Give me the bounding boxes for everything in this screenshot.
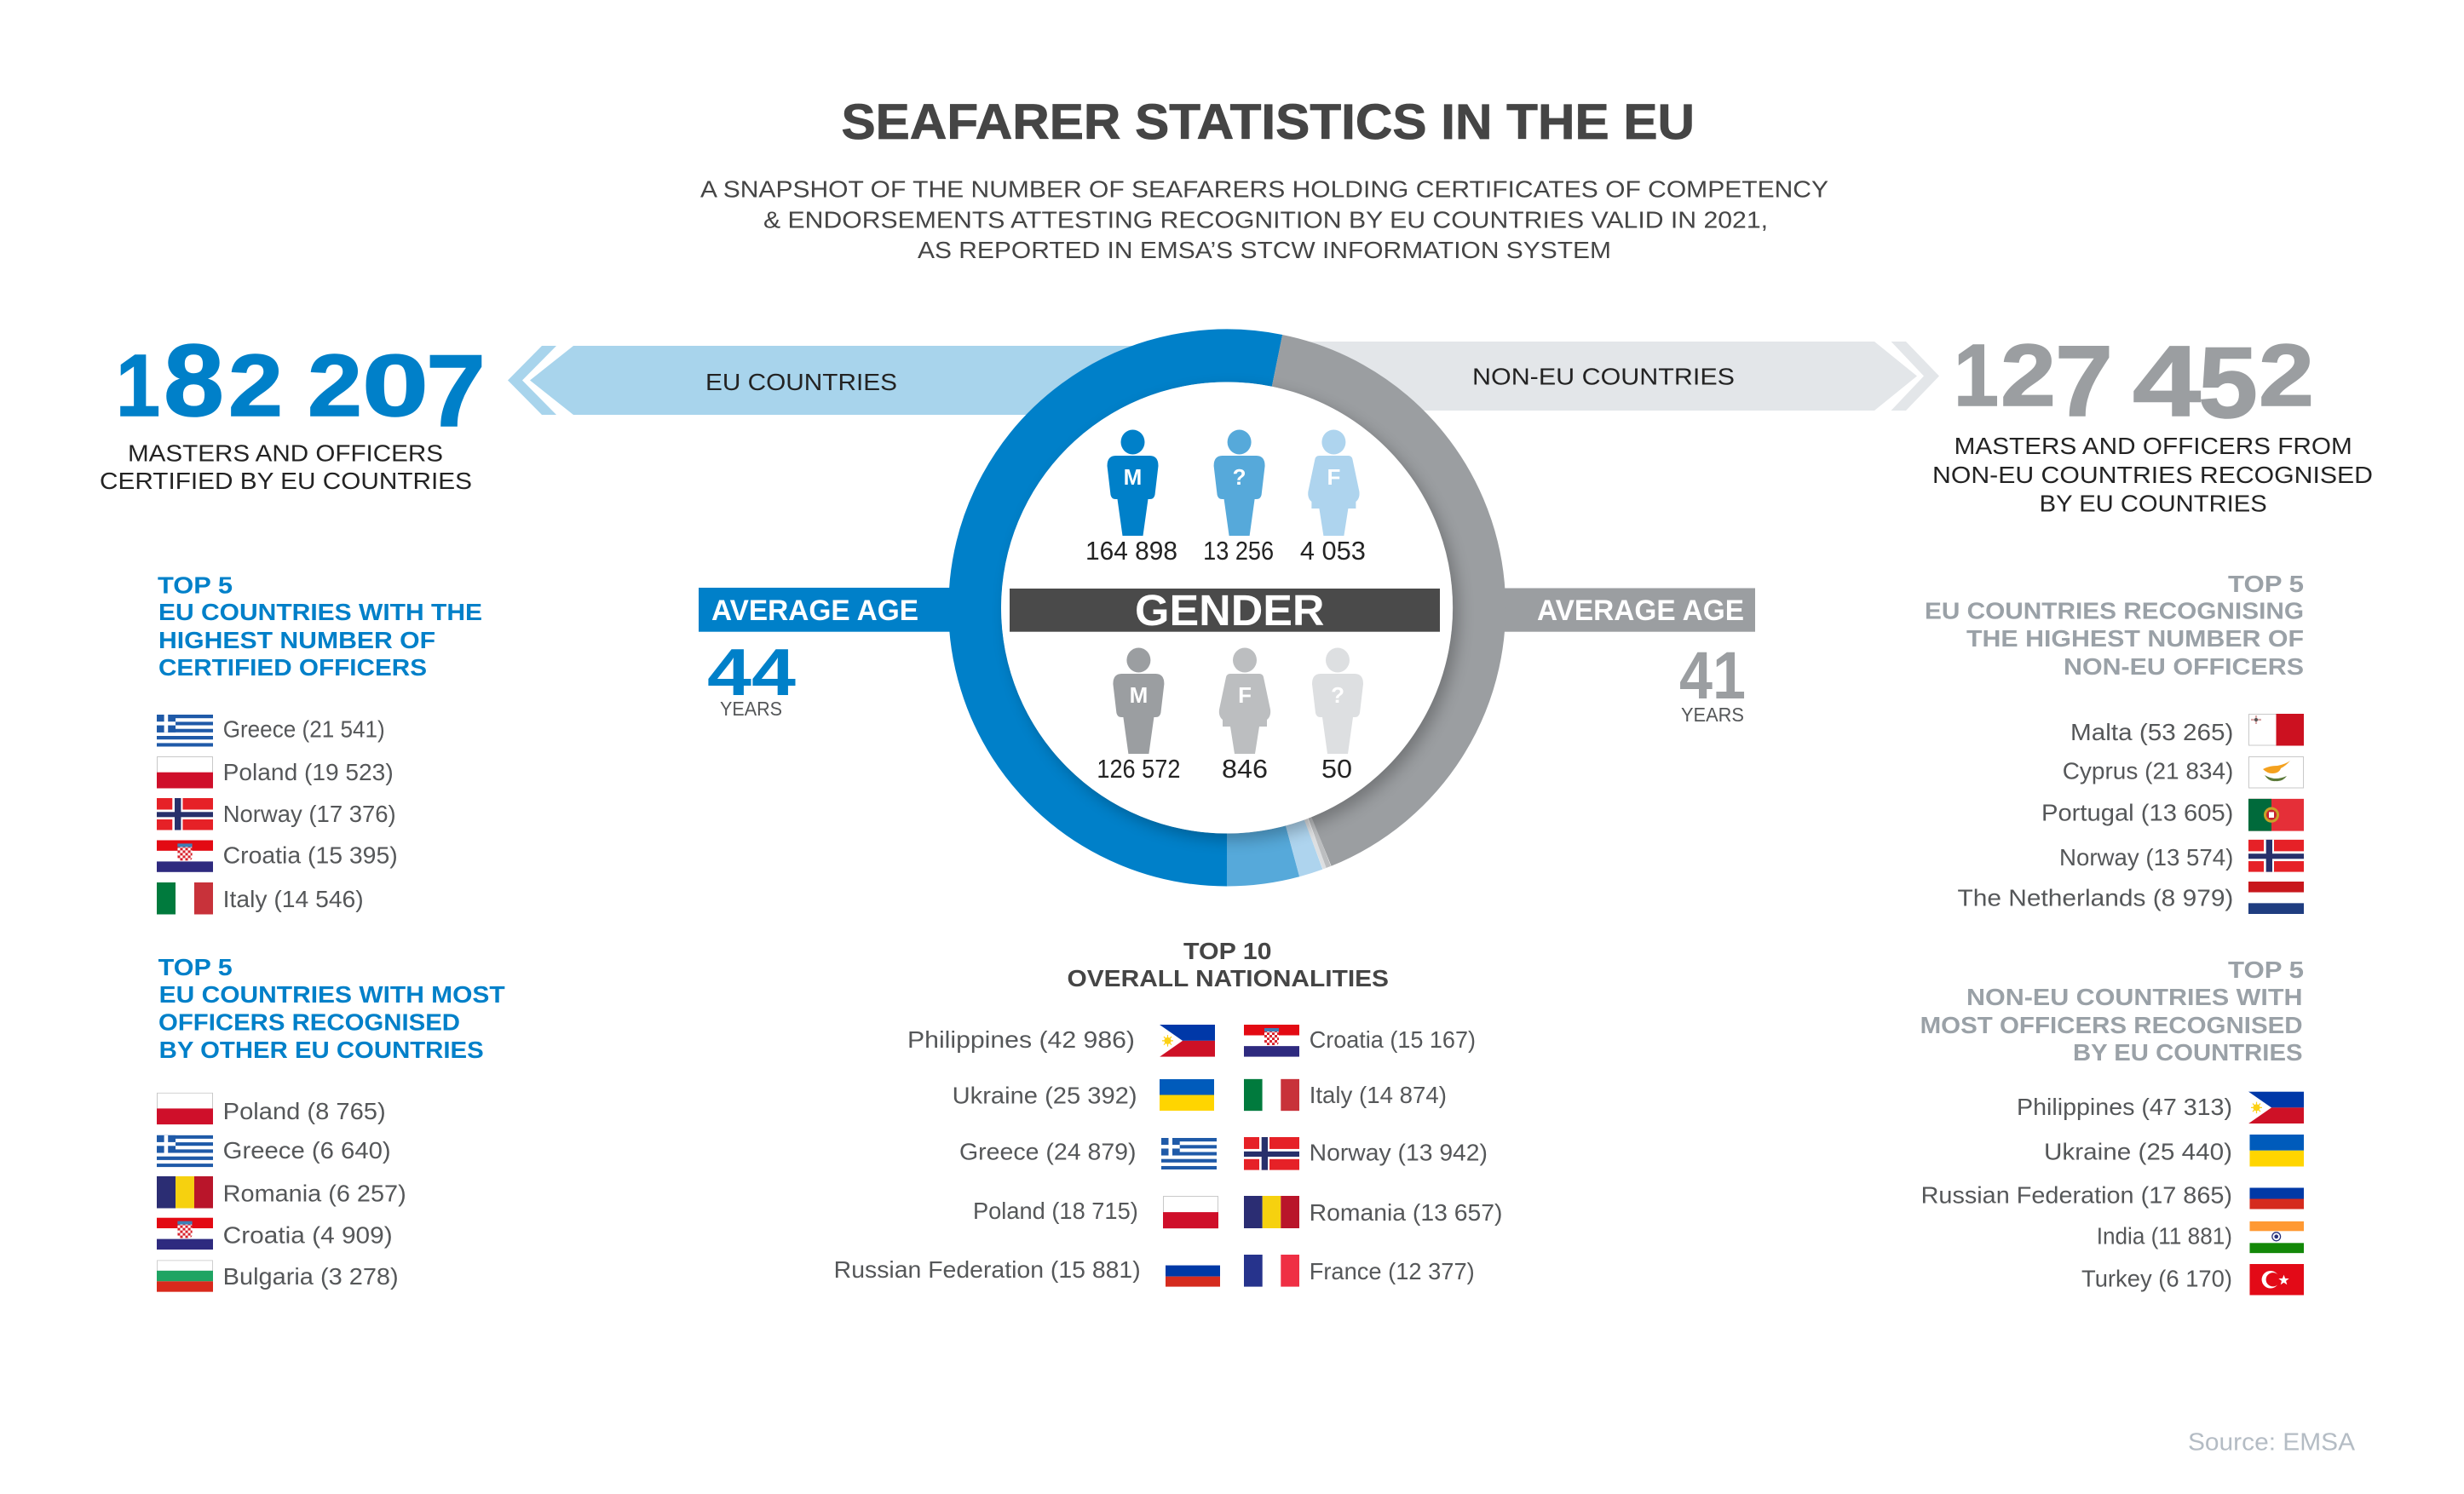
caption: EU total: CERTIFIED BY EU COUNTRIES — [100, 468, 472, 494]
row: Russian Federation: Russian Federation (17 865) — [1921, 1182, 2232, 1208]
row: Norway — [157, 798, 396, 830]
row: Greece — [157, 715, 385, 746]
row: Greece: Greece (24 879) — [959, 1138, 1137, 1165]
row: Poland — [973, 1197, 1218, 1228]
row: Greece: Greece (21 541) — [223, 715, 385, 743]
row: Greece — [157, 1135, 391, 1167]
row: Portugal — [2041, 799, 2304, 831]
subtitle: & ENDORSEMENTS ATTESTING RECOGNITION BY EU COUNTRIES VALID IN 2021, — [763, 207, 1768, 233]
person: EU female 4 053: F — [1327, 464, 1340, 490]
big number: EU total — [116, 324, 486, 448]
row: Poland: Poland (8 765) — [223, 1098, 386, 1124]
row: The Netherlands — [1958, 882, 2304, 914]
row: Norway — [1244, 1137, 1488, 1170]
row: Croatia — [1244, 1025, 1476, 1057]
arrow: EU countries: EU COUNTRIES — [705, 369, 897, 395]
panel: top 5 non-EU countries recognised by EU — [1920, 957, 2304, 1295]
panel: top 5 EU countries recognising non-EU officers — [1925, 571, 2304, 914]
caption: EU total — [100, 440, 472, 494]
arrow: non-EU countries — [1278, 342, 1939, 411]
row: Norway: Norway (13 942) — [1310, 1140, 1488, 1165]
row: Poland — [157, 756, 394, 789]
gender band: GENDER — [1135, 586, 1324, 635]
row: Italy: Italy (14 874) — [1310, 1082, 1447, 1108]
person: EU male 164 898: M — [1124, 464, 1142, 490]
row: Turkey: Turkey (6 170) — [2081, 1266, 2232, 1291]
row: Ukraine — [2044, 1135, 2304, 1167]
person: EU unknown 13 256: 13 256 — [1203, 536, 1274, 566]
person: EU male 164 898: 164 898 — [1085, 536, 1177, 566]
heading: EU COUNTRIES RECOGNISING — [1925, 598, 2304, 624]
row: Portugal: Portugal (13 605) — [2041, 799, 2233, 826]
heading: BY OTHER EU COUNTRIES — [159, 1037, 484, 1063]
average age: EU: 44 — [707, 635, 796, 710]
big number: EU total: 2 — [228, 336, 283, 434]
heading: OVERALL NATIONALITIES — [1067, 965, 1389, 991]
heading: MOST OFFICERS RECOGNISED — [1920, 1012, 2303, 1038]
row: Russian Federation: Russian Federation (15 881) — [834, 1256, 1141, 1283]
average age: EU: YEARS — [720, 698, 782, 720]
row: Poland — [157, 1093, 386, 1124]
person: EU unknown 13 256 — [1203, 429, 1274, 566]
heading: NON-EU COUNTRIES WITH — [1966, 984, 2302, 1010]
heading: TOP 5 — [2228, 571, 2304, 597]
heading — [1067, 938, 1389, 991]
caption: non-EU total — [1932, 433, 2373, 517]
row: India: India (11 881) — [2097, 1223, 2232, 1249]
subtitle — [700, 176, 1828, 263]
row: Norway: Norway (17 376) — [223, 801, 396, 827]
big number: EU total: 7 — [426, 334, 486, 448]
row: Ukraine — [953, 1079, 1214, 1111]
heading — [1925, 571, 2304, 680]
big number: EU total: 0 — [362, 336, 429, 434]
heading: THE HIGHEST NUMBER OF — [1966, 625, 2304, 652]
person: EU female 4 053: 4 053 — [1300, 536, 1366, 566]
heading: OFFICERS RECOGNISED — [158, 1008, 460, 1035]
person: non-EU unknown 50: ? — [1331, 682, 1344, 708]
row: The Netherlands: The Netherlands (8 979) — [1958, 884, 2233, 911]
caption: non-EU total: MASTERS AND OFFICERS FROM — [1955, 433, 2352, 459]
person: non-EU unknown 50: 50 — [1321, 754, 1352, 784]
big number: EU total: 2 — [308, 336, 362, 434]
big number: non-EU total — [1954, 325, 2314, 440]
panel: top 5 EU countries certified officers — [157, 572, 482, 915]
heading: BY EU COUNTRIES — [2073, 1039, 2302, 1066]
row: Poland: Poland (18 715) — [973, 1198, 1138, 1224]
subtitle: AS REPORTED IN EMSA’S STCW INFORMATION SYSTEM — [918, 237, 1611, 263]
heading: TOP 5 — [2228, 957, 2304, 983]
heading: HIGHEST NUMBER OF — [158, 627, 435, 653]
heading — [158, 572, 482, 681]
title: SEAFARER STATISTICS IN THE EU — [842, 95, 1695, 150]
gender band — [1010, 586, 1440, 635]
row: Turkey — [2081, 1264, 2304, 1295]
heading — [158, 954, 505, 1063]
row: Croatia — [157, 1218, 393, 1250]
source: Source: EMSA — [2188, 1429, 2356, 1457]
row: Ukraine: Ukraine (25 440) — [2044, 1138, 2232, 1165]
row: Romania — [1244, 1196, 1502, 1228]
row: Italy: Italy (14 546) — [223, 886, 364, 912]
heading: CERTIFIED OFFICERS — [158, 654, 427, 681]
caption: non-EU total: BY EU COUNTRIES — [2040, 491, 2267, 517]
caption: EU total: MASTERS AND OFFICERS — [128, 440, 443, 467]
big number: non-EU total: 7 — [2055, 325, 2113, 438]
row: Bulgaria: Bulgaria (3 278) — [223, 1263, 399, 1290]
row: Greece: Greece (6 640) — [223, 1137, 391, 1164]
row: Norway: Norway (13 574) — [2059, 844, 2233, 871]
row: Croatia — [157, 840, 398, 872]
average age: non-EU: AVERAGE AGE — [1537, 595, 1744, 627]
row: Greece — [959, 1138, 1217, 1169]
person: non-EU female 846: F — [1238, 682, 1252, 708]
person: non-EU male 126 572: M — [1130, 682, 1148, 708]
heading: TOP 10 — [1183, 938, 1271, 964]
row: Italy — [1244, 1079, 1447, 1111]
row: Philippines — [907, 1025, 1215, 1057]
row: Poland: Poland (19 523) — [223, 759, 394, 785]
caption: non-EU total: NON-EU COUNTRIES RECOGNISED — [1932, 462, 2373, 488]
big number: non-EU total: 1 — [1954, 326, 1999, 424]
person: non-EU unknown 50 — [1312, 647, 1363, 784]
row: Cyprus — [2063, 756, 2304, 788]
arrow: non-EU countries: NON-EU COUNTRIES — [1472, 364, 1735, 390]
row: Romania — [157, 1176, 406, 1208]
gender donut ring — [975, 356, 1479, 859]
panel: top 5 EU countries recognised by other EU — [157, 954, 505, 1292]
person: EU unknown 13 256: ? — [1233, 464, 1246, 490]
average age: non-EU: YEARS — [1681, 704, 1744, 726]
row: Philippines: Philippines (42 986) — [907, 1026, 1135, 1053]
big number: EU total: 8 — [164, 324, 224, 438]
row: Bulgaria — [157, 1261, 399, 1292]
big number: EU total: 1 — [116, 336, 160, 434]
heading: EU COUNTRIES WITH THE — [158, 599, 482, 625]
person: non-EU male 126 572 — [1097, 647, 1180, 784]
row: Philippines: Philippines (47 313) — [2017, 1094, 2232, 1120]
person: non-EU female 846: 846 — [1222, 754, 1268, 784]
heading: TOP 5 — [158, 572, 233, 599]
row: Ukraine: Ukraine (25 392) — [953, 1082, 1137, 1109]
big number: non-EU total: 4 — [2133, 325, 2201, 438]
row: Norway — [2059, 840, 2304, 872]
heading — [1920, 957, 2304, 1066]
panel: top 10 overall nationalities — [834, 938, 1502, 1287]
heading: EU COUNTRIES WITH MOST — [159, 981, 505, 1008]
average age: EU — [699, 588, 971, 720]
row: Philippines — [2017, 1092, 2304, 1123]
arrow: EU countries — [508, 346, 1142, 415]
row: France — [1244, 1255, 1475, 1287]
person: EU female 4 053 — [1300, 429, 1366, 566]
row: Croatia: Croatia (4 909) — [223, 1221, 393, 1249]
person: EU male 164 898 — [1085, 429, 1177, 566]
heading: NON-EU OFFICERS — [2064, 653, 2304, 680]
big number: non-EU total: 2 — [2259, 326, 2314, 424]
big number: non-EU total: 5 — [2198, 327, 2258, 440]
row: Russian Federation — [834, 1256, 1220, 1287]
row: Romania: Romania (6 257) — [223, 1181, 406, 1206]
row: France: France (12 377) — [1310, 1258, 1475, 1284]
person: non-EU female 846 — [1219, 647, 1270, 784]
row: Croatia: Croatia (15 395) — [223, 842, 398, 869]
row: Cyprus: Cyprus (21 834) — [2063, 758, 2233, 784]
row: India — [2097, 1221, 2304, 1253]
heading: TOP 5 — [158, 954, 233, 980]
row: Croatia: Croatia (15 167) — [1310, 1026, 1476, 1053]
average age: non-EU — [1482, 588, 1755, 726]
big number: non-EU total: 2 — [2001, 326, 2056, 424]
row: Malta: Malta (53 265) — [2070, 719, 2233, 745]
row: Romania: Romania (13 657) — [1310, 1199, 1502, 1226]
row: Italy — [157, 882, 364, 915]
person: non-EU male 126 572: 126 572 — [1097, 754, 1180, 784]
subtitle: A SNAPSHOT OF THE NUMBER OF SEAFARERS HOLDING CERTIFICATES OF COMPETENCY — [700, 176, 1828, 203]
average age: non-EU: 41 — [1679, 637, 1746, 713]
average age: EU: AVERAGE AGE — [711, 595, 918, 627]
row: Malta — [2070, 714, 2304, 746]
